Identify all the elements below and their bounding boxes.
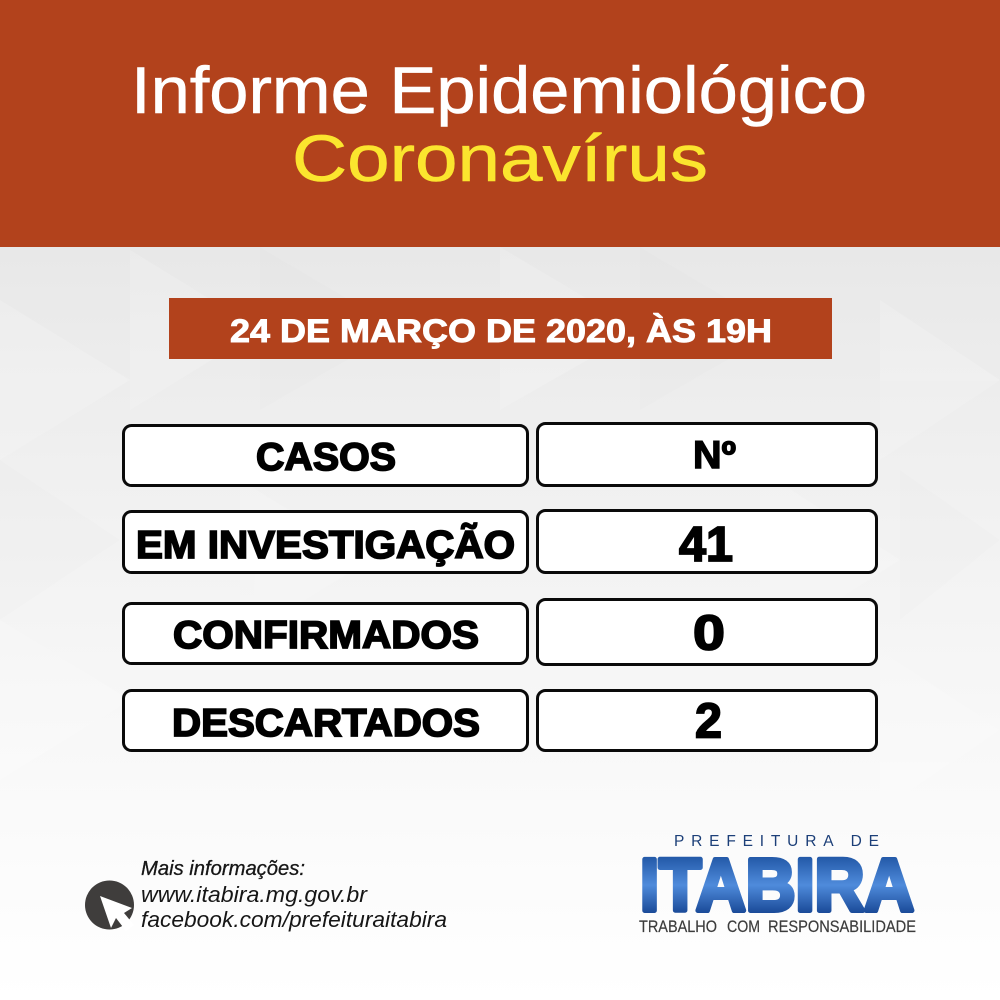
date banner: 24 DE MARÇO DE 2020, ÀS 19H: [230, 313, 772, 349]
row: descartados label: DESCARTADOS: [172, 702, 480, 745]
logo: Prefeitura de Itabira: COM: [727, 917, 760, 936]
row: em investigacao value: [538, 510, 876, 572]
background: [0, 247, 1000, 1000]
title: Informe Epidemiológico: [131, 53, 867, 127]
row: descartados value: 2: [695, 694, 722, 748]
row: confirmados value: 0: [693, 606, 725, 660]
row: descartados label: [124, 690, 528, 750]
header banner: [0, 0, 1000, 247]
row: em investigacao label: [124, 512, 528, 572]
row: em investigacao value: 41: [679, 518, 733, 572]
row: descartados value: [538, 690, 876, 750]
subtitle: Coronavírus: [292, 121, 708, 195]
logo: Prefeitura de Itabira: ITABIRA: [640, 844, 914, 926]
row: numero header: [538, 424, 876, 486]
row: confirmados label: CONFIRMADOS: [173, 614, 479, 657]
logo: Prefeitura de Itabira: PREFEITURA DE: [674, 833, 879, 850]
table: [124, 424, 876, 750]
row: casos label: CASOS: [256, 436, 396, 479]
logo: Prefeitura de Itabira: TRABALHO: [639, 917, 717, 936]
logo: Prefeitura de Itabira: RESPONSABILIDADE: [768, 917, 916, 936]
row: numero header: Nº: [693, 434, 736, 477]
row: casos label: [124, 426, 528, 486]
contact text: [141, 857, 447, 932]
row: em investigacao label: EM INVESTIGAÇÃO: [136, 523, 515, 567]
date banner: [169, 298, 832, 359]
contact text: www.itabira.mg.gov.br: [141, 882, 369, 907]
row: confirmados value: [538, 600, 876, 664]
contact text: facebook.com/prefeituraitabira: [141, 907, 447, 932]
contact text: Mais informações:: [141, 857, 305, 880]
row: confirmados label: [124, 604, 528, 664]
icon: cursor: [85, 880, 134, 931]
